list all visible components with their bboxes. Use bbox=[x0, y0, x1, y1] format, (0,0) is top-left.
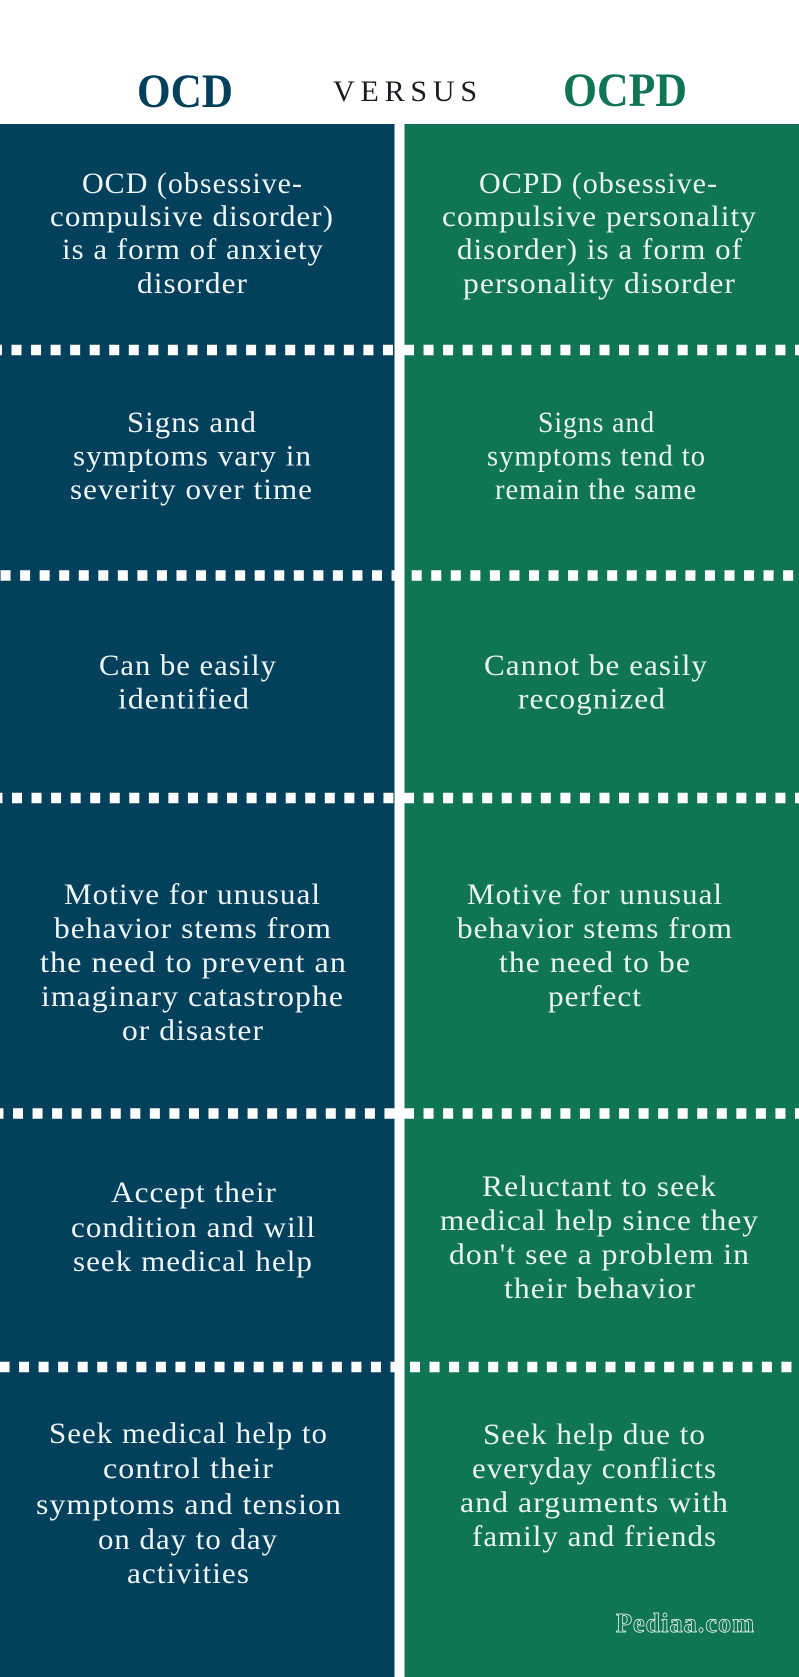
text: OCD acceptance: condition and will bbox=[71, 1211, 316, 1244]
text: OCPD motive: Motive for unusual bbox=[467, 878, 723, 911]
text: OCPD definition: disorder) is a form of bbox=[457, 233, 743, 266]
text: OCD reason for seeking help: symptoms and tension bbox=[36, 1488, 342, 1521]
text: OCD motive: Motive for unusual bbox=[64, 878, 321, 911]
text: OCD symptoms: severity over time bbox=[70, 473, 313, 506]
text: OCD motive bbox=[40, 878, 347, 1047]
text: OCPD symptoms bbox=[487, 406, 706, 506]
text: OCPD definition bbox=[442, 167, 757, 300]
text: OCD reason for seeking help: on day to day bbox=[98, 1523, 278, 1556]
text: OCD identification bbox=[99, 649, 277, 716]
heading: VERSUS: VERSUS bbox=[333, 75, 477, 108]
text: OCPD reluctance bbox=[440, 1170, 759, 1305]
text: OCD reason for seeking help bbox=[36, 1417, 342, 1590]
text: OCD motive: behavior stems from bbox=[54, 912, 332, 945]
text: OCD definition: OCD (obsessive- bbox=[82, 167, 303, 200]
text: OCD identification: identified bbox=[118, 682, 250, 716]
text: OCPD definition: personality disorder bbox=[463, 267, 736, 300]
text: OCPD definition: compulsive personality bbox=[442, 200, 757, 233]
text: OCPD reason for seeking help: and arguments with bbox=[460, 1486, 729, 1519]
text: OCD acceptance: seek medical help bbox=[73, 1245, 313, 1278]
text: OCD symptoms: symptoms vary in bbox=[73, 440, 312, 472]
text: OCPD symptoms: Signs and bbox=[538, 406, 655, 439]
text: OCD identification: Can be easily bbox=[99, 649, 277, 682]
text: OCPD reason for seeking help: Seek help due to bbox=[483, 1418, 706, 1451]
logo: Pediaa.com: Pediaa.com bbox=[616, 1608, 755, 1638]
text: OCPD reason for seeking help: everyday conflicts bbox=[472, 1452, 717, 1485]
heading: OCPD: OCPD bbox=[563, 64, 687, 117]
text: OCPD reluctance: don't see a problem in bbox=[449, 1238, 750, 1271]
text: OCPD identification bbox=[484, 649, 708, 716]
text: OCD definition: is a form of anxiety bbox=[62, 233, 324, 266]
panel: OCPD column background bbox=[404, 124, 799, 1677]
text: OCD acceptance: Accept their bbox=[111, 1176, 277, 1209]
text: OCD definition bbox=[50, 167, 334, 300]
text: OCD reason for seeking help: control their bbox=[103, 1452, 274, 1485]
text: OCD definition: compulsive disorder) bbox=[50, 200, 334, 233]
text: OCPD definition: OCPD (obsessive- bbox=[479, 167, 718, 200]
text: OCD reason for seeking help: activities bbox=[127, 1557, 250, 1590]
panel: OCD column background bbox=[0, 124, 394, 1677]
text: OCPD symptoms: remain the same bbox=[495, 473, 697, 506]
text: OCD motive: the need to prevent an bbox=[40, 946, 347, 979]
text: OCD definition: disorder bbox=[137, 267, 248, 300]
text: OCD motive: or disaster bbox=[122, 1014, 264, 1047]
text: OCPD reason for seeking help bbox=[460, 1418, 729, 1553]
text: OCPD reluctance: their behavior bbox=[504, 1272, 696, 1305]
text: OCPD symptoms: symptoms tend to bbox=[487, 440, 706, 472]
heading: OCD: OCD bbox=[137, 65, 233, 118]
text: OCPD motive bbox=[457, 878, 733, 1013]
text: OCPD reluctance: medical help since they bbox=[440, 1204, 759, 1237]
text: OCPD motive: perfect bbox=[548, 980, 642, 1013]
text: OCPD motive: behavior stems from bbox=[457, 912, 733, 945]
text: OCD motive: imaginary catastrophe bbox=[41, 980, 344, 1013]
text: OCPD identification: Cannot be easily bbox=[484, 649, 708, 682]
text: OCPD identification: recognized bbox=[518, 682, 666, 716]
text: OCD symptoms bbox=[70, 406, 313, 506]
text: OCD acceptance bbox=[71, 1176, 316, 1278]
text: OCPD reluctance: Reluctant to seek bbox=[482, 1170, 717, 1203]
text: OCD symptoms: Signs and bbox=[127, 406, 257, 439]
text: OCPD motive: the need to be bbox=[499, 946, 691, 979]
text: OCPD reason for seeking help: family and friends bbox=[472, 1520, 717, 1553]
text: OCD reason for seeking help: Seek medical help to bbox=[49, 1417, 328, 1450]
